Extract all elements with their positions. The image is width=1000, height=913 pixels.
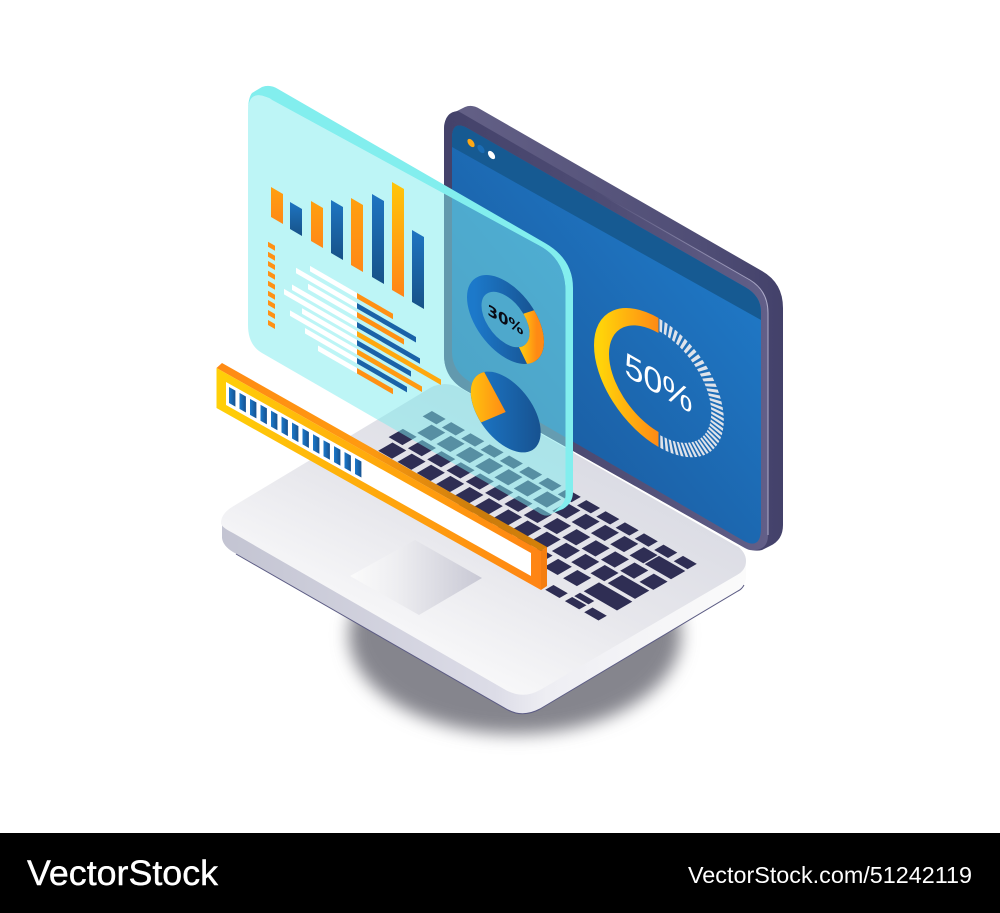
base bottom edge line (236, 554, 744, 714)
donut label: 30% (488, 301, 523, 339)
bar chart (271, 182, 424, 309)
donut blue ring (474, 270, 537, 369)
50% gauge (602, 292, 718, 475)
keyboard (335, 412, 696, 620)
progress segments (229, 387, 361, 478)
screen display panel (452, 126, 761, 544)
progress bar side face (541, 547, 547, 590)
progress bar front frame (216, 368, 541, 590)
base back edge highlight (575, 453, 738, 546)
glass bright edge (248, 86, 573, 516)
footer image id: VectorStock.com/51242119 (688, 862, 972, 888)
donut orange segment (523, 309, 537, 363)
horizontal bar list (284, 251, 441, 422)
footer bar (0, 833, 1000, 913)
pie blue disc (471, 357, 541, 467)
progress bar top face (216, 363, 547, 551)
glass face (248, 95, 566, 516)
progress bar (216, 363, 547, 590)
screen front bezel (444, 111, 768, 550)
gauge orange arc (602, 293, 658, 440)
laptop drop shadow (349, 536, 681, 734)
pie chart (471, 357, 541, 467)
base top surface (221, 384, 746, 695)
window header bar (452, 126, 761, 320)
screen lid outer body (444, 106, 783, 551)
footer brand: VectorStock (27, 854, 219, 893)
pie orange slice (471, 364, 506, 437)
progress bar track (226, 382, 531, 576)
donut chart 30% (474, 270, 537, 369)
gauge label: 50% (624, 344, 693, 422)
glass panel (248, 86, 573, 516)
coloured bars (357, 293, 441, 422)
bezel highlight line (600, 194, 768, 535)
window control dots (467, 137, 495, 161)
laptop screen (444, 106, 783, 551)
laptop base (221, 384, 746, 714)
base side thickness (222, 522, 746, 714)
white bars (284, 251, 357, 374)
gauge tick arc (660, 325, 718, 475)
orange tick column (268, 242, 275, 329)
trackpad (350, 540, 482, 615)
